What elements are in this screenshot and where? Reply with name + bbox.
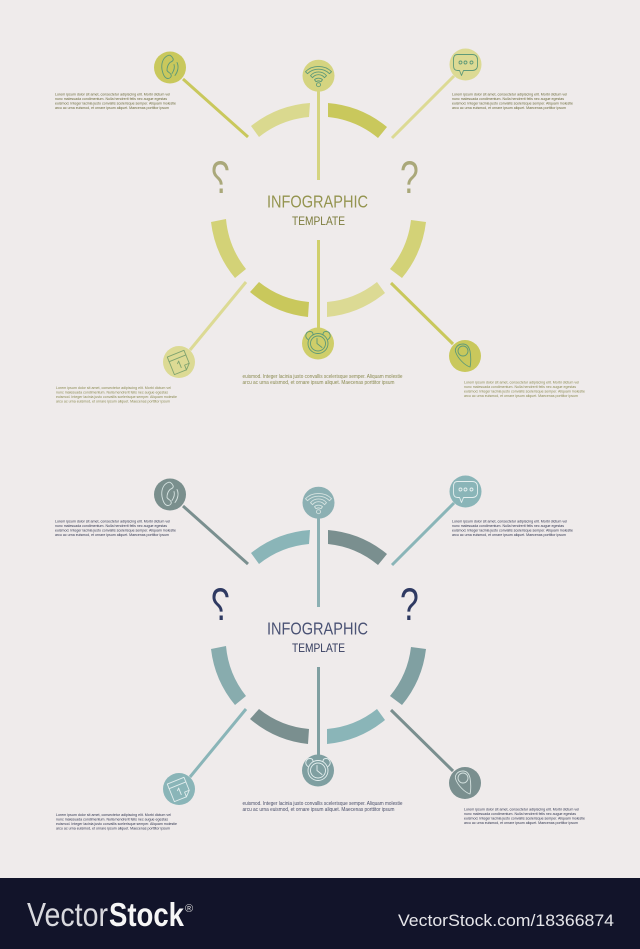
logo: Vector: Vector — [27, 896, 108, 933]
text block: bottom right: euismod. Integer lacinia justo convallis scelerisque semper. Aliquam molestie — [464, 816, 585, 820]
text block: bottom left: euismod. Integer lacinia justo convallis scelerisque semper. Aliquam molestie — [56, 394, 177, 399]
ring segment: top left — [251, 530, 310, 564]
text block: top left — [55, 519, 176, 537]
text block: bottom right: arcu ac urna euismod, et ornare ipsum aliquet. Maecenas porttitor ipsum — [464, 393, 578, 398]
icon: alarm clock — [302, 754, 334, 786]
ring segment: bottom right — [327, 282, 385, 317]
text block: bottom left — [56, 812, 177, 830]
text block: bottom right: Lorem ipsum dolor sit amet, consectetur adipiscing elit. Morbi dictum vel — [464, 380, 579, 384]
ring segment: right — [390, 220, 426, 278]
text block: top right: nunc malesuada condimentum. Nulla hendrerit felis nec augue egestas — [452, 96, 564, 101]
text block: top left: arcu ac urna euismod, et ornare ipsum aliquet. Maecenas porttitor ipsum — [55, 105, 169, 110]
footer bar — [0, 878, 640, 949]
icon: calendar — [163, 773, 195, 805]
text block: top right: euismod. Integer lacinia justo convallis scelerisque semper. Aliquam molestie — [452, 101, 573, 106]
image id: VectorStock.com/18366874 — [398, 911, 614, 930]
connector: calendar — [190, 709, 246, 777]
text block: top left: arcu ac urna euismod, et ornare ipsum aliquet. Maecenas porttitor ipsum — [55, 532, 169, 537]
question mark: left: ? — [211, 153, 230, 203]
text block: top right: arcu ac urna euismod, et ornare ipsum aliquet. Maecenas porttitor ipsum — [452, 105, 566, 110]
icon: map pin — [449, 767, 481, 799]
connector: phone — [183, 79, 248, 137]
icon: chat bubble — [450, 476, 482, 508]
text block: bottom left: arcu ac urna euismod, et ornare ipsum aliquet. Maecenas porttitor ipsum — [56, 826, 170, 830]
ring segment: bottom right — [327, 709, 385, 744]
ring segment: top left — [251, 103, 310, 137]
connector: wifi — [317, 90, 320, 180]
text block: bottom left — [56, 385, 177, 404]
question mark: right: ? — [400, 580, 419, 630]
question mark: right: ? — [400, 153, 419, 203]
ring segment: bottom left — [250, 709, 309, 744]
text block: bottom left: arcu ac urna euismod, et ornare ipsum aliquet. Maecenas porttitor ipsum — [56, 398, 170, 404]
text block: top right: Lorem ipsum dolor sit amet, consectetur adipiscing elit. Morbi dictum vel — [452, 519, 567, 524]
connector: clock — [317, 240, 320, 330]
text block: bottom right: nunc malesuada condimentum. Nulla hendrerit felis nec augue egestas — [464, 384, 576, 389]
ring segment: top right — [328, 103, 387, 138]
connector: phone — [183, 506, 248, 564]
ring segment: bottom left — [250, 282, 309, 317]
connector: pin — [391, 283, 453, 344]
text block: bottom left: Lorem ipsum dolor sit amet, consectetur adipiscing elit. Morbi dictum vel — [56, 812, 171, 817]
icon: map pin — [449, 340, 481, 372]
text block: top left — [55, 92, 176, 110]
ring segment: left — [211, 219, 246, 278]
text block: bottom center — [242, 801, 403, 813]
panel: teal infographic — [55, 476, 585, 830]
text block: top right: arcu ac urna euismod, et ornare ipsum aliquet. Maecenas porttitor ipsum — [452, 532, 566, 537]
panel: olive infographic — [55, 48, 585, 404]
ring segment: right — [390, 647, 426, 705]
text block: bottom right: arcu ac urna euismod, et ornare ipsum aliquet. Maecenas porttitor ipsum — [464, 820, 578, 825]
text block: bottom right — [464, 806, 585, 825]
connector: chat — [392, 503, 454, 565]
ring segment: left — [211, 646, 246, 705]
connector: clock — [317, 667, 320, 757]
icon: calendar — [163, 346, 195, 378]
icon: phone — [154, 478, 186, 510]
subtitle: TEMPLATE — [292, 216, 345, 228]
connector: wifi — [317, 517, 320, 607]
icon: wifi — [302, 487, 334, 519]
logo: Stock: Stock — [109, 896, 185, 933]
ring segment: top right — [328, 530, 387, 565]
text block: top left: euismod. Integer lacinia justo convallis scelerisque semper. Aliquam molestie — [55, 101, 176, 106]
text block: bottom center: arcu ac urna euismod, et ornare ipsum aliquet. Maecenas porttitor ipsum — [242, 380, 394, 386]
question mark: left: ? — [211, 580, 230, 630]
text block: bottom right — [464, 380, 585, 398]
connector: chat — [392, 76, 454, 138]
subtitle: TEMPLATE — [292, 643, 345, 655]
icon: chat bubble — [450, 48, 482, 80]
text block: top left: Lorem ipsum dolor sit amet, consectetur adipiscing elit. Morbi dictum vel — [55, 519, 170, 524]
text block: top left: nunc malesuada condimentum. Nulla hendrerit felis nec augue egestas — [55, 96, 167, 101]
text block: bottom right: nunc malesuada condimentum. Nulla hendrerit felis nec augue egestas — [464, 811, 576, 816]
text block: top right — [452, 519, 573, 537]
text block: top right: nunc malesuada condimentum. Nulla hendrerit felis nec augue egestas — [452, 523, 564, 528]
text block: bottom right: Lorem ipsum dolor sit amet, consectetur adipiscing elit. Morbi dictum vel — [464, 806, 579, 812]
icon: alarm clock — [302, 328, 334, 360]
text block: top left: Lorem ipsum dolor sit amet, consectetur adipiscing elit. Morbi dictum vel — [55, 92, 170, 97]
text block: bottom left: Lorem ipsum dolor sit amet, consectetur adipiscing elit. Morbi dictum vel — [56, 385, 171, 390]
title: INFOGRAPHIC — [267, 618, 368, 638]
text block: top right — [452, 92, 573, 110]
text block: bottom left: nunc malesuada condimentum. Nulla hendrerit felis nec augue egestas — [56, 816, 168, 822]
text block: top left: nunc malesuada condimentum. Nulla hendrerit felis nec augue egestas — [55, 523, 167, 528]
icon: phone — [154, 52, 186, 84]
text block: bottom center: arcu ac urna euismod, et ornare ipsum aliquet. Maecenas porttitor ipsum — [242, 807, 394, 813]
text block: bottom left: nunc malesuada condimentum. Nulla hendrerit felis nec augue egestas — [56, 390, 168, 394]
text block: top right: euismod. Integer lacinia justo convallis scelerisque semper. Aliquam molestie — [452, 528, 573, 533]
text block: bottom left: euismod. Integer lacinia justo convallis scelerisque semper. Aliquam molestie — [56, 821, 177, 826]
connector: pin — [391, 710, 453, 771]
text block: bottom right: euismod. Integer lacinia justo convallis scelerisque semper. Aliquam molestie — [464, 388, 585, 394]
icon: wifi — [302, 60, 334, 92]
text block: top right: Lorem ipsum dolor sit amet, consectetur adipiscing elit. Morbi dictum vel — [452, 92, 567, 97]
connector: calendar — [190, 282, 246, 350]
text block: bottom center: euismod. Integer lacinia justo convallis scelerisque semper. Aliquam molestie — [242, 801, 403, 807]
text block: bottom center — [242, 374, 403, 386]
text block: bottom center: euismod. Integer lacinia justo convallis scelerisque semper. Aliquam molestie — [242, 374, 403, 380]
text block: top left: euismod. Integer lacinia justo convallis scelerisque semper. Aliquam molestie — [55, 528, 176, 533]
registered mark: ® — [185, 903, 193, 915]
title: INFOGRAPHIC — [267, 192, 368, 212]
